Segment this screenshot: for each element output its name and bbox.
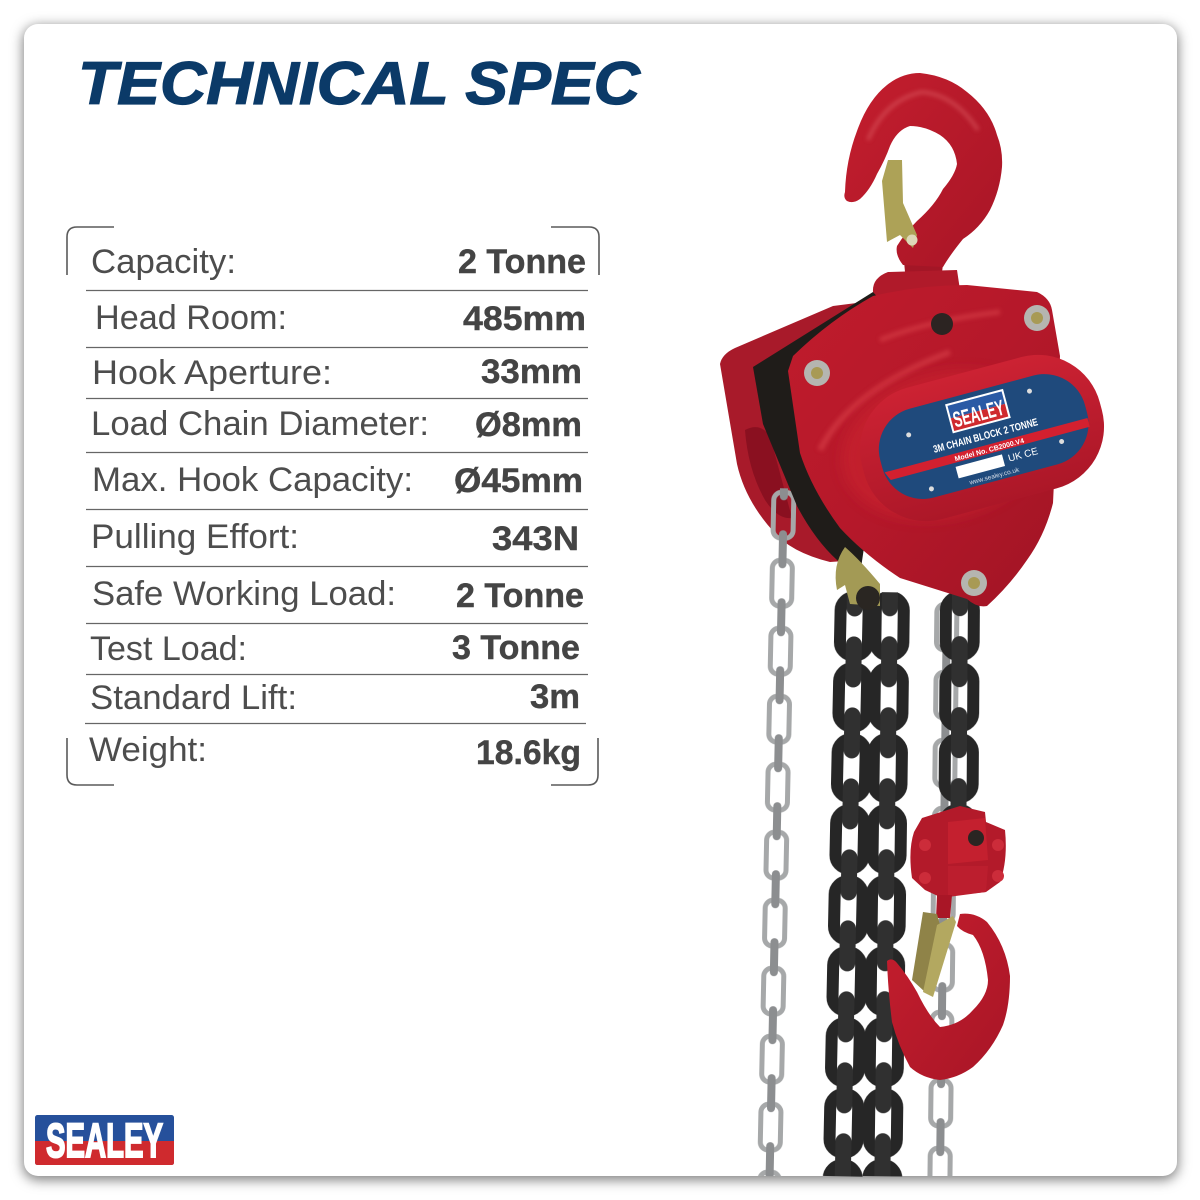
row: max hook capacity: Max. Hook Capacity:: [92, 461, 413, 499]
row: standard lift: [90, 678, 580, 717]
hook swivel and lug: [873, 250, 960, 300]
row: load chain diameter: [91, 405, 582, 444]
sealey logo: [35, 1115, 174, 1168]
row: capacity: [91, 243, 586, 281]
bolts and plug: [804, 305, 1050, 596]
black band between housings: [753, 292, 900, 575]
nameplate: Model No. CB2000.V4: [954, 438, 1025, 463]
row: hook aperture: [92, 353, 582, 392]
hook body: [844, 73, 1002, 267]
title: TECHNICAL SPEC: [78, 50, 642, 117]
row: max hook capacity: Ø45mm: [454, 462, 583, 500]
lower block: [910, 806, 1006, 918]
silver hand chain right: [926, 600, 961, 1176]
black load chain right: [936, 592, 982, 816]
rear housing: [720, 300, 880, 562]
top hook: [844, 73, 1002, 300]
product: chain block: [720, 73, 1118, 1177]
row: test load: 3 Tonne: [452, 629, 580, 667]
black load chain left: [821, 592, 877, 1177]
row: safe working load: [92, 575, 584, 615]
row: head room: Head Room:: [95, 299, 287, 337]
hook latch: [882, 160, 917, 248]
front plate: [788, 285, 1060, 606]
row: head room: 485mm: [463, 300, 586, 338]
row: pulling effort: Pulling Effort:: [91, 518, 299, 556]
row: test load: Test Load:: [90, 630, 247, 668]
nameplate: 3M CHAIN BLOCK 2 TONNE: [932, 416, 1039, 456]
specification table: [67, 227, 599, 785]
row: head room: [95, 299, 586, 338]
nameplate: UK CE: [1007, 446, 1040, 465]
table bracket frame: [67, 227, 599, 785]
nameplate: [869, 365, 1098, 508]
silver hand chain left: [756, 488, 798, 1176]
row: weight: [89, 731, 581, 772]
row: test load: [90, 629, 580, 668]
lower hook: [887, 912, 1010, 1080]
row: weight: Weight:: [89, 731, 207, 769]
nameplate logo: [945, 389, 1011, 433]
row: standard lift: 3m: [530, 678, 580, 716]
nameplate: www.sealey.co.uk: [968, 466, 1021, 487]
oval housing and nameplate: [846, 340, 1118, 536]
row: load chain diameter: Load Chain Diameter:: [91, 405, 429, 443]
row: safe working load: Safe Working Load:: [92, 575, 396, 613]
row: capacity: 2 Tonne: [458, 243, 586, 281]
row: hook aperture: Hook Aperture:: [92, 354, 332, 392]
row: standard lift: Standard Lift:: [90, 679, 297, 717]
row: safe working load: 2 Tonne: [456, 577, 584, 615]
sealey logo: SEALEY: [46, 1115, 163, 1168]
row: hook aperture: 33mm: [481, 353, 582, 391]
row: load chain diameter: Ø8mm: [475, 406, 582, 444]
black load chain centre: [860, 592, 912, 1177]
row: max hook capacity: [92, 461, 583, 500]
gold clevis: [836, 547, 880, 610]
plate highlights: [820, 312, 1000, 450]
row: pulling effort: [91, 518, 579, 558]
nameplate logo: SEALEY: [950, 395, 1007, 432]
row: weight: 18.6kg: [476, 734, 581, 772]
row: capacity: Capacity:: [91, 243, 236, 281]
raised bulge shading: [825, 348, 1065, 542]
row: pulling effort: 343N: [492, 520, 579, 558]
